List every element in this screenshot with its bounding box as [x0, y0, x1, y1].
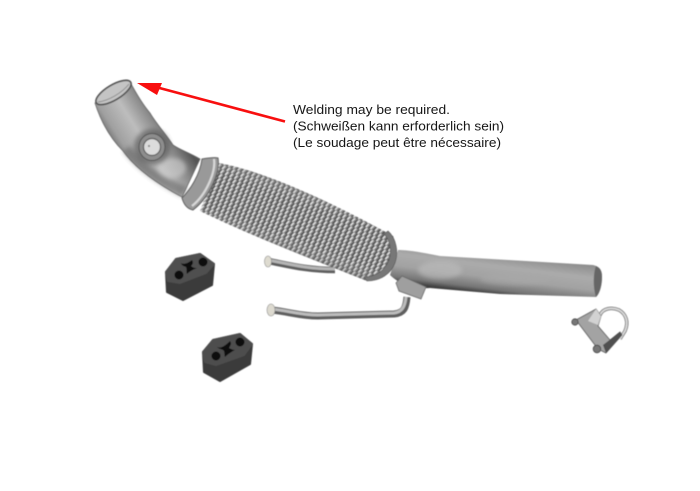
exhaust clamp	[572, 308, 627, 353]
exhaust pipe assembly	[92, 76, 602, 316]
welding note: (Schweißen kann erforderlich sein)	[293, 118, 504, 134]
welded flange collar	[182, 158, 218, 210]
rear fuel pipe upper	[264, 256, 335, 270]
tail pipe	[390, 250, 602, 297]
welding note: Welding may be required.	[293, 102, 450, 117]
rubber hanger bottom	[203, 334, 252, 381]
red arrow pointing to the tube opening	[137, 83, 285, 122]
bent inlet tube	[92, 76, 200, 197]
braid end collar	[364, 231, 397, 281]
mounting bracket	[396, 276, 426, 299]
welding note: (Le soudage peut être nécessaire)	[293, 135, 501, 150]
sensor boss	[134, 129, 170, 165]
tube opening	[92, 76, 135, 109]
rubber hanger top	[166, 254, 214, 300]
lower fuel pipe	[267, 297, 407, 316]
flexible braided section	[200, 163, 397, 281]
welding note	[293, 102, 504, 150]
